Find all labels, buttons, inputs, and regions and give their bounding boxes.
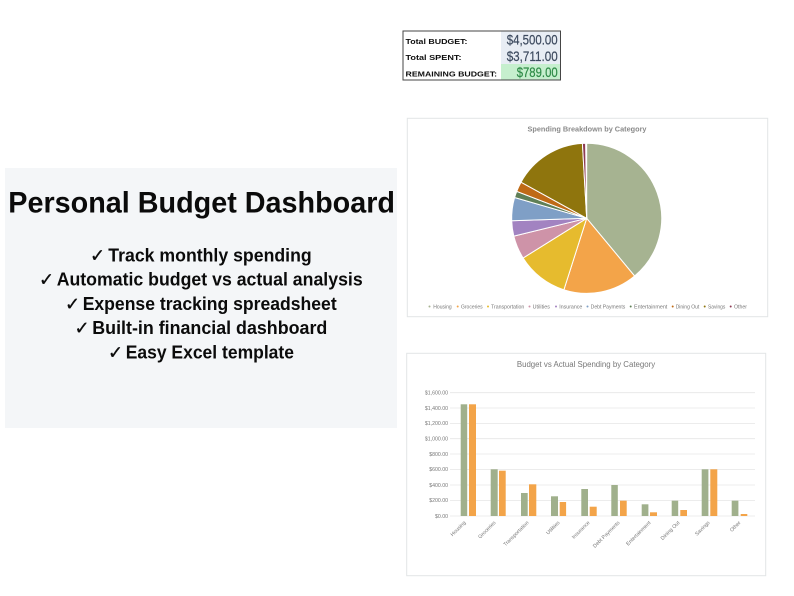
pie chart legend: Transportation <box>491 304 525 310</box>
bar chart y axis labels: $1,200.00 <box>425 421 448 427</box>
budget summary table: Total SPENT: <box>406 53 462 62</box>
feature list: Expense tracking spreadsheet <box>83 293 337 314</box>
pie chart legend: Groceries <box>461 304 483 310</box>
feature list: Easy Excel template <box>126 341 294 362</box>
bars: actual <box>469 404 747 516</box>
bar chart y axis labels: $0.00 <box>435 514 448 520</box>
bar chart x axis labels: Savings <box>694 520 712 537</box>
bar chart gridlines <box>450 393 755 516</box>
budget summary table: Total BUDGET: <box>406 37 468 46</box>
feature list: Built-in financial dashboard <box>92 317 327 338</box>
bar chart x axis labels: Other <box>729 520 743 534</box>
bar chart x axis labels: Transportation <box>503 520 530 548</box>
feature list <box>39 245 363 363</box>
pie chart legend: Other <box>734 304 747 310</box>
panel: bar chart frame <box>407 353 766 576</box>
feature list: Automatic budget vs actual analysis <box>57 269 363 290</box>
budget summary table: REMAINING BUDGET: <box>406 70 497 78</box>
bar chart title: Budget vs Actual Spending by Category <box>517 359 656 369</box>
bar chart x axis labels: Dining Out <box>660 520 682 542</box>
panel: pie chart frame <box>407 118 768 317</box>
feature list: ✓ <box>65 294 80 315</box>
bar chart y axis labels: $1,600.00 <box>425 390 448 396</box>
bar chart x axis labels: Debt Payments <box>592 520 622 549</box>
bar chart y axis labels: $600.00 <box>429 467 448 473</box>
feature list: ✓ <box>74 318 90 339</box>
bar chart x axis labels: Utilities <box>545 520 562 536</box>
pie chart legend: Housing <box>433 304 452 310</box>
bar chart x axis labels: Entertainment <box>625 520 653 547</box>
pie chart legend: Debt Payments <box>591 304 626 310</box>
panel: product summary <box>5 168 397 428</box>
bar chart y axis labels: $1,400.00 <box>425 406 448 412</box>
pie chart legend: Dining Out <box>676 304 700 310</box>
bar chart y axis labels: $1,000.00 <box>425 436 448 442</box>
title: Personal Budget Dashboard <box>8 187 395 220</box>
bars: budget <box>461 404 738 516</box>
bar chart y axis labels <box>425 390 448 520</box>
feature list: ✓ <box>108 342 123 363</box>
bar chart x axis labels <box>450 520 743 549</box>
budget summary table <box>403 31 560 80</box>
budget summary table: $3,711.00 <box>507 48 558 64</box>
pie chart legend: Utilities <box>533 304 551 310</box>
pie chart <box>512 143 662 293</box>
feature list: Track monthly spending <box>108 245 312 266</box>
bar chart y axis labels: $200.00 <box>429 498 448 504</box>
bar chart y axis labels: $800.00 <box>429 452 448 458</box>
budget summary table: $4,500.00 <box>507 32 558 48</box>
pie chart legend <box>428 304 747 310</box>
pie chart legend: Entertainment <box>634 304 668 310</box>
feature list: ✓ <box>90 246 105 267</box>
pie chart title: Spending Breakdown by Category <box>528 124 647 134</box>
feature list: ✓ <box>39 270 54 291</box>
bar chart x axis labels: Groceries <box>477 520 498 540</box>
pie chart legend: Insurance <box>559 304 583 310</box>
bar chart y axis labels: $400.00 <box>429 483 448 489</box>
bar chart x axis labels: Insurance <box>571 520 591 541</box>
bar chart x axis labels: Housing <box>450 520 467 538</box>
pie chart legend: Savings <box>708 304 726 310</box>
budget summary table: $789.00 <box>517 65 558 80</box>
